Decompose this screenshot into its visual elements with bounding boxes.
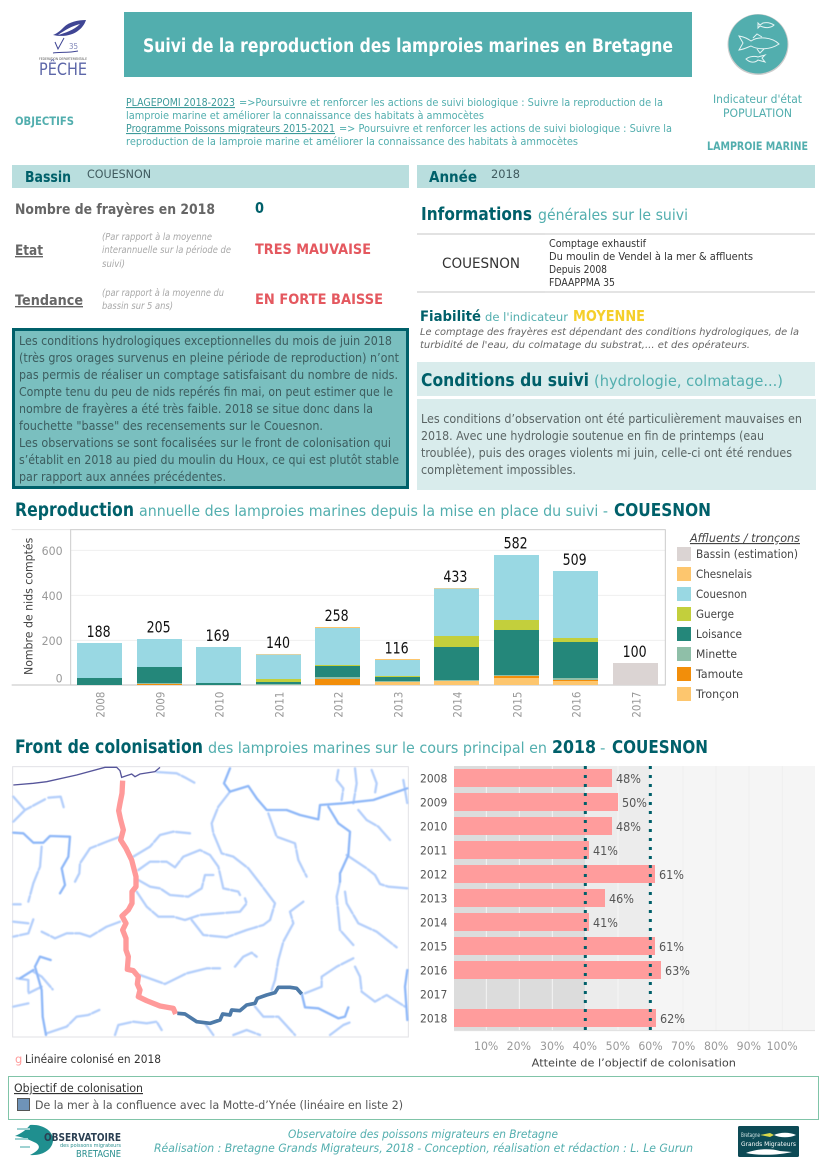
indicateur label: POPULATION [723,106,792,120]
year labels: 2016 [420,964,447,978]
tendance: EN FORTE BAISSE [255,292,383,308]
percentage values: 41% [593,844,618,858]
year labels: 2015 [420,940,447,954]
année header: Année [429,168,477,186]
logo: bretagne grands migrateurs: Bretagne [741,1132,760,1139]
nombre de frayères: 0 [255,199,264,217]
x axis labels: 50% [606,1039,630,1053]
legend: affluents / tronçons: Chesnelais [696,567,752,581]
legend: affluents / tronçons [677,531,800,701]
etat: suivi) [102,259,125,270]
bar values: 140 [266,633,290,652]
x axis years: 2013 [391,692,405,718]
bar values [87,534,647,661]
y axis labels: 400 [42,589,63,603]
etat: interannuelle sur la période de [102,245,231,256]
x axis years: 2010 [212,692,226,718]
bassin header: COUESNON [87,167,151,181]
year labels: 2008 [420,772,447,786]
footer credits [154,1127,693,1155]
map legend: g [15,1052,22,1066]
legend: affluents / tronçons: Minette [696,647,737,661]
percentage values: 46% [609,892,634,906]
etat: TRES MAUVAISE [255,242,371,258]
etat: (Par rapport à la moyenne [102,232,212,243]
panel: conditions du suivi: Les conditions d’observation ont été particulièrement mauvaises en [421,412,802,426]
tendance [15,288,383,312]
rivers [13,768,407,1035]
percentage values: 62% [660,1012,685,1026]
bar values: 509 [563,550,587,569]
x axis labels: 90% [737,1039,761,1053]
heading: informations générales [421,204,688,225]
panel: commentaire conditions hydrologiques: (très gros orages survenus en pleine période de reproduction) n’ont [19,351,399,365]
table: informations générales [417,233,815,293]
table: informations générales: FDAAPPMA 35 [549,277,615,289]
table: informations générales: Comptage exhaustif [549,238,646,250]
bar values: 433 [443,567,467,586]
percentage values: 48% [616,820,641,834]
legend: affluents / tronçons: Loisance [696,627,742,641]
panel: commentaire conditions hydrologiques [14,330,408,488]
heading: front de colonisation: COUESNON [612,737,708,758]
x axis years: 2014 [450,692,464,718]
percentage values: 41% [593,916,618,930]
bar values: 258 [325,606,349,625]
bar chart: nids comptés par année [12,530,665,718]
fiabilité: Fiabilité [420,309,481,325]
bar chart: atteinte de l'objectif de colonisation [420,766,815,1070]
objectifs text: =>Poursuivre et renforcer les actions de suivi biologique : Suivre la reproduction de la [239,96,663,109]
stacked bars [77,555,658,685]
legend: affluents / tronçons: Bassin (estimation) [696,547,798,561]
bar values: 188 [87,622,111,641]
title banner: Suivi de la reproduction des lamproies marines en Bretagne [143,36,673,57]
logo: observatoire bretagne: BRETAGNE [76,1149,121,1160]
legend: affluents / tronçons: Affluents / tronçons [689,531,800,545]
y axis labels: 0 [56,671,63,685]
heading: front de colonisation: des lamproies marines sur le cours principal en [208,739,547,757]
colonised reach [119,781,176,1014]
percentage values: 63% [665,964,690,978]
panel: commentaire conditions hydrologiques: pas permis de réaliser un comptage satisfaisant du nombre de nids. [19,368,398,382]
année header [417,165,815,188]
logo: observatoire bretagne: OBSERVATOIRE [44,1131,121,1144]
panel: commentaire conditions hydrologiques: fouchette "basse" des recensements sur le Couesnon. [19,419,323,433]
logo: bretagne grands migrateurs: Grands Migrateurs [741,1140,797,1148]
bar values: 169 [206,626,230,645]
x axis years [93,692,643,718]
heading: front de colonisation [15,736,708,758]
logo: fédération de pêche 35 [39,20,87,80]
x axis years: 2016 [569,692,583,718]
panel: objectif de colonisation [8,1076,818,1120]
heading: conditions du suivi: Conditions du suivi [421,370,589,391]
x axis labels: 20% [507,1039,531,1053]
année header: 2018 [491,167,520,181]
logo: observatoire bretagne: des poissons migrateurs [60,1143,121,1149]
x axis years: 2011 [272,692,286,718]
bassin header: Bassin [25,168,71,186]
x axis labels [474,1039,798,1053]
legend: affluents / tronçons: Couesnon [696,587,747,601]
objectifs text: => Poursuivre et renforcer les actions de suivi biologique : Suivre la [339,122,672,135]
logo: observatoire bretagne [15,1125,121,1160]
indicateur label: Indicateur d'état [713,92,802,106]
objectifs text: Programme Poissons migrateurs 2015-2021 [126,122,335,135]
remaining reach [177,987,302,1023]
y axis labels [42,544,63,685]
y axis title: Nombre de nids comptés [21,538,35,675]
heading: reproduction: COUESNON [614,500,711,521]
footer credits: Réalisation : Bretagne Grands Migrateurs, 2018 - Conception, réalisation et rédaction : L. Le Gurun [154,1141,693,1155]
footer credits: Observatoire des poissons migrateurs en Bretagne [288,1127,558,1141]
x axis labels: 80% [704,1039,729,1053]
fiabilité: MOYENNE [573,307,645,325]
heading: reproduction [15,499,711,521]
table: informations générales: Du moulin de Vendel à la mer & affluents [549,251,753,263]
percentage values: 61% [659,940,684,954]
etat [15,232,371,270]
map legend: Linéaire colonisé en 2018 [25,1052,161,1066]
x axis title: Atteinte de l’objectif de colonisation [532,1057,736,1070]
x axis labels: 60% [638,1039,663,1053]
tendance: bassin sur 5 ans) [102,301,173,312]
year labels: 2010 [420,820,447,834]
x axis years: 2008 [93,692,107,718]
heading: reproduction: annuelle des lamproies marines depuis la mise en place du suivi - [139,502,608,520]
panel: commentaire conditions hydrologiques: Les observations se sont focalisées sur le front de colonisation qui [19,436,391,450]
logo: fédération de pêche 35: PÊCHE [39,58,87,80]
y axis labels: 600 [42,544,63,558]
tendance: (par rapport à la moyenne du [102,288,224,299]
objectifs text [126,96,672,148]
fiabilité: turbidité de l'eau, du colmatage du substrat,... et des opérateurs. [420,339,750,351]
heading: informations générales: Informations [421,204,532,225]
x axis labels: 40% [573,1039,597,1053]
x axis labels: 100% [767,1039,798,1053]
percentage values [593,772,690,1026]
indicateur label: LAMPROIE MARINE [707,139,808,153]
percentage values: 50% [622,796,647,810]
x axis labels: 30% [540,1039,565,1053]
panel: conditions du suivi: 2018. Avec une hydrologie soutenue en fin de printemps (eau [421,429,764,443]
bassin header [12,165,409,188]
coastline [13,767,160,785]
panel: commentaire conditions hydrologiques: Compte tenu du peu de nids repérés fin mai, on peut estimer que le [19,385,393,399]
title banner [124,12,692,77]
year labels: 2014 [420,916,447,930]
heading: conditions du suivi: (hydrologie, colmatage...) [594,372,783,390]
year labels: 2017 [420,988,447,1002]
tendance: Tendance [15,293,83,309]
x axis years: 2012 [331,692,345,718]
indicateur label [707,92,808,153]
fiabilité: de l'indicateur [485,310,568,324]
legend: affluents / tronçons: Tamoute [695,667,743,681]
heading: front de colonisation: Front de colonisation [15,736,203,758]
bar values: 116 [385,638,409,657]
objectifs text: PLAGEPOMI 2018-2023 [126,96,235,109]
year labels: 2018 [420,1012,447,1026]
objective lines [585,766,650,1031]
map: front de colonisation [13,767,408,1037]
bars [454,769,661,1027]
logo: fédération de pêche 35: 35 [69,42,78,51]
nombre de frayères: Nombre de frayères en 2018 [15,202,215,218]
x axis years: 2015 [510,692,524,718]
panel: conditions du suivi: complètement impossibles. [421,463,576,477]
bar values: 100 [623,642,647,661]
fiabilité [420,307,799,351]
y axis labels: 200 [42,634,63,648]
panel: commentaire conditions hydrologiques: par rapport aux années précédentes. [19,470,226,484]
heading: front de colonisation: - [600,739,605,757]
heading: front de colonisation: 2018 [552,737,596,758]
bar values: 205 [147,618,171,637]
legend: affluents / tronçons: Tronçon [695,687,739,701]
year labels: 2012 [420,868,447,882]
table: informations générales: COUESNON [442,256,520,272]
panel: commentaire conditions hydrologiques: s’établit en 2018 au pied du moulin du Houx, ce qui est plutôt stable [19,453,399,467]
heading: conditions du suivi [417,362,815,396]
objectifs text: lamproie marine et améliorer la connaissance des habitats à ammocètes [126,109,484,122]
x axis years: 2017 [629,692,643,718]
bar values: 582 [504,534,528,553]
year labels: 2011 [420,844,447,858]
year labels: 2013 [420,892,447,906]
x axis labels: 70% [671,1039,696,1053]
icon: fish population [728,14,788,75]
percentage values: 48% [616,772,641,786]
panel: objectif de colonisation: Objectif de colonisation [14,1081,143,1095]
panel: objectif de colonisation: De la mer à la confluence avec la Motte-d’Ynée (linéaire en liste 2) [35,1098,403,1112]
panel: commentaire conditions hydrologiques: nombre de frayères a été très faible. 2018 se situe donc dans la [19,402,373,416]
table: informations générales: Depuis 2008 [549,264,607,276]
percentage values: 61% [659,868,684,882]
objectifs label: OBJECTIFS [15,114,74,128]
fiabilité: Le comptage des frayères est dépendant des conditions hydrologiques, de la [420,326,799,338]
panel: conditions du suivi: troublée), puis des orages violents mi juin, celle-ci ont été rendues [421,446,792,460]
legend: affluents / tronçons: Guerge [696,607,734,621]
year labels [420,772,447,1026]
year labels: 2009 [420,796,447,810]
logo: bretagne grands migrateurs [738,1126,799,1157]
heading: informations générales: générales sur le suivi [538,206,688,224]
x axis labels: 10% [474,1039,499,1053]
objectifs text: reproduction de la lamproie marine et améliorer la connaissance des habitats à ammocètes [126,135,578,148]
logo: fédération de pêche 35: FEDERATION DEPARTEMENTALE [39,57,87,61]
panel: commentaire conditions hydrologiques: Les conditions hydrologiques exceptionnelles du mois de juin 2018 [19,334,392,348]
etat: Etat [15,243,43,259]
panel: conditions du suivi [417,399,816,490]
heading: reproduction: Reproduction [15,499,134,521]
x axis years: 2009 [153,692,167,718]
